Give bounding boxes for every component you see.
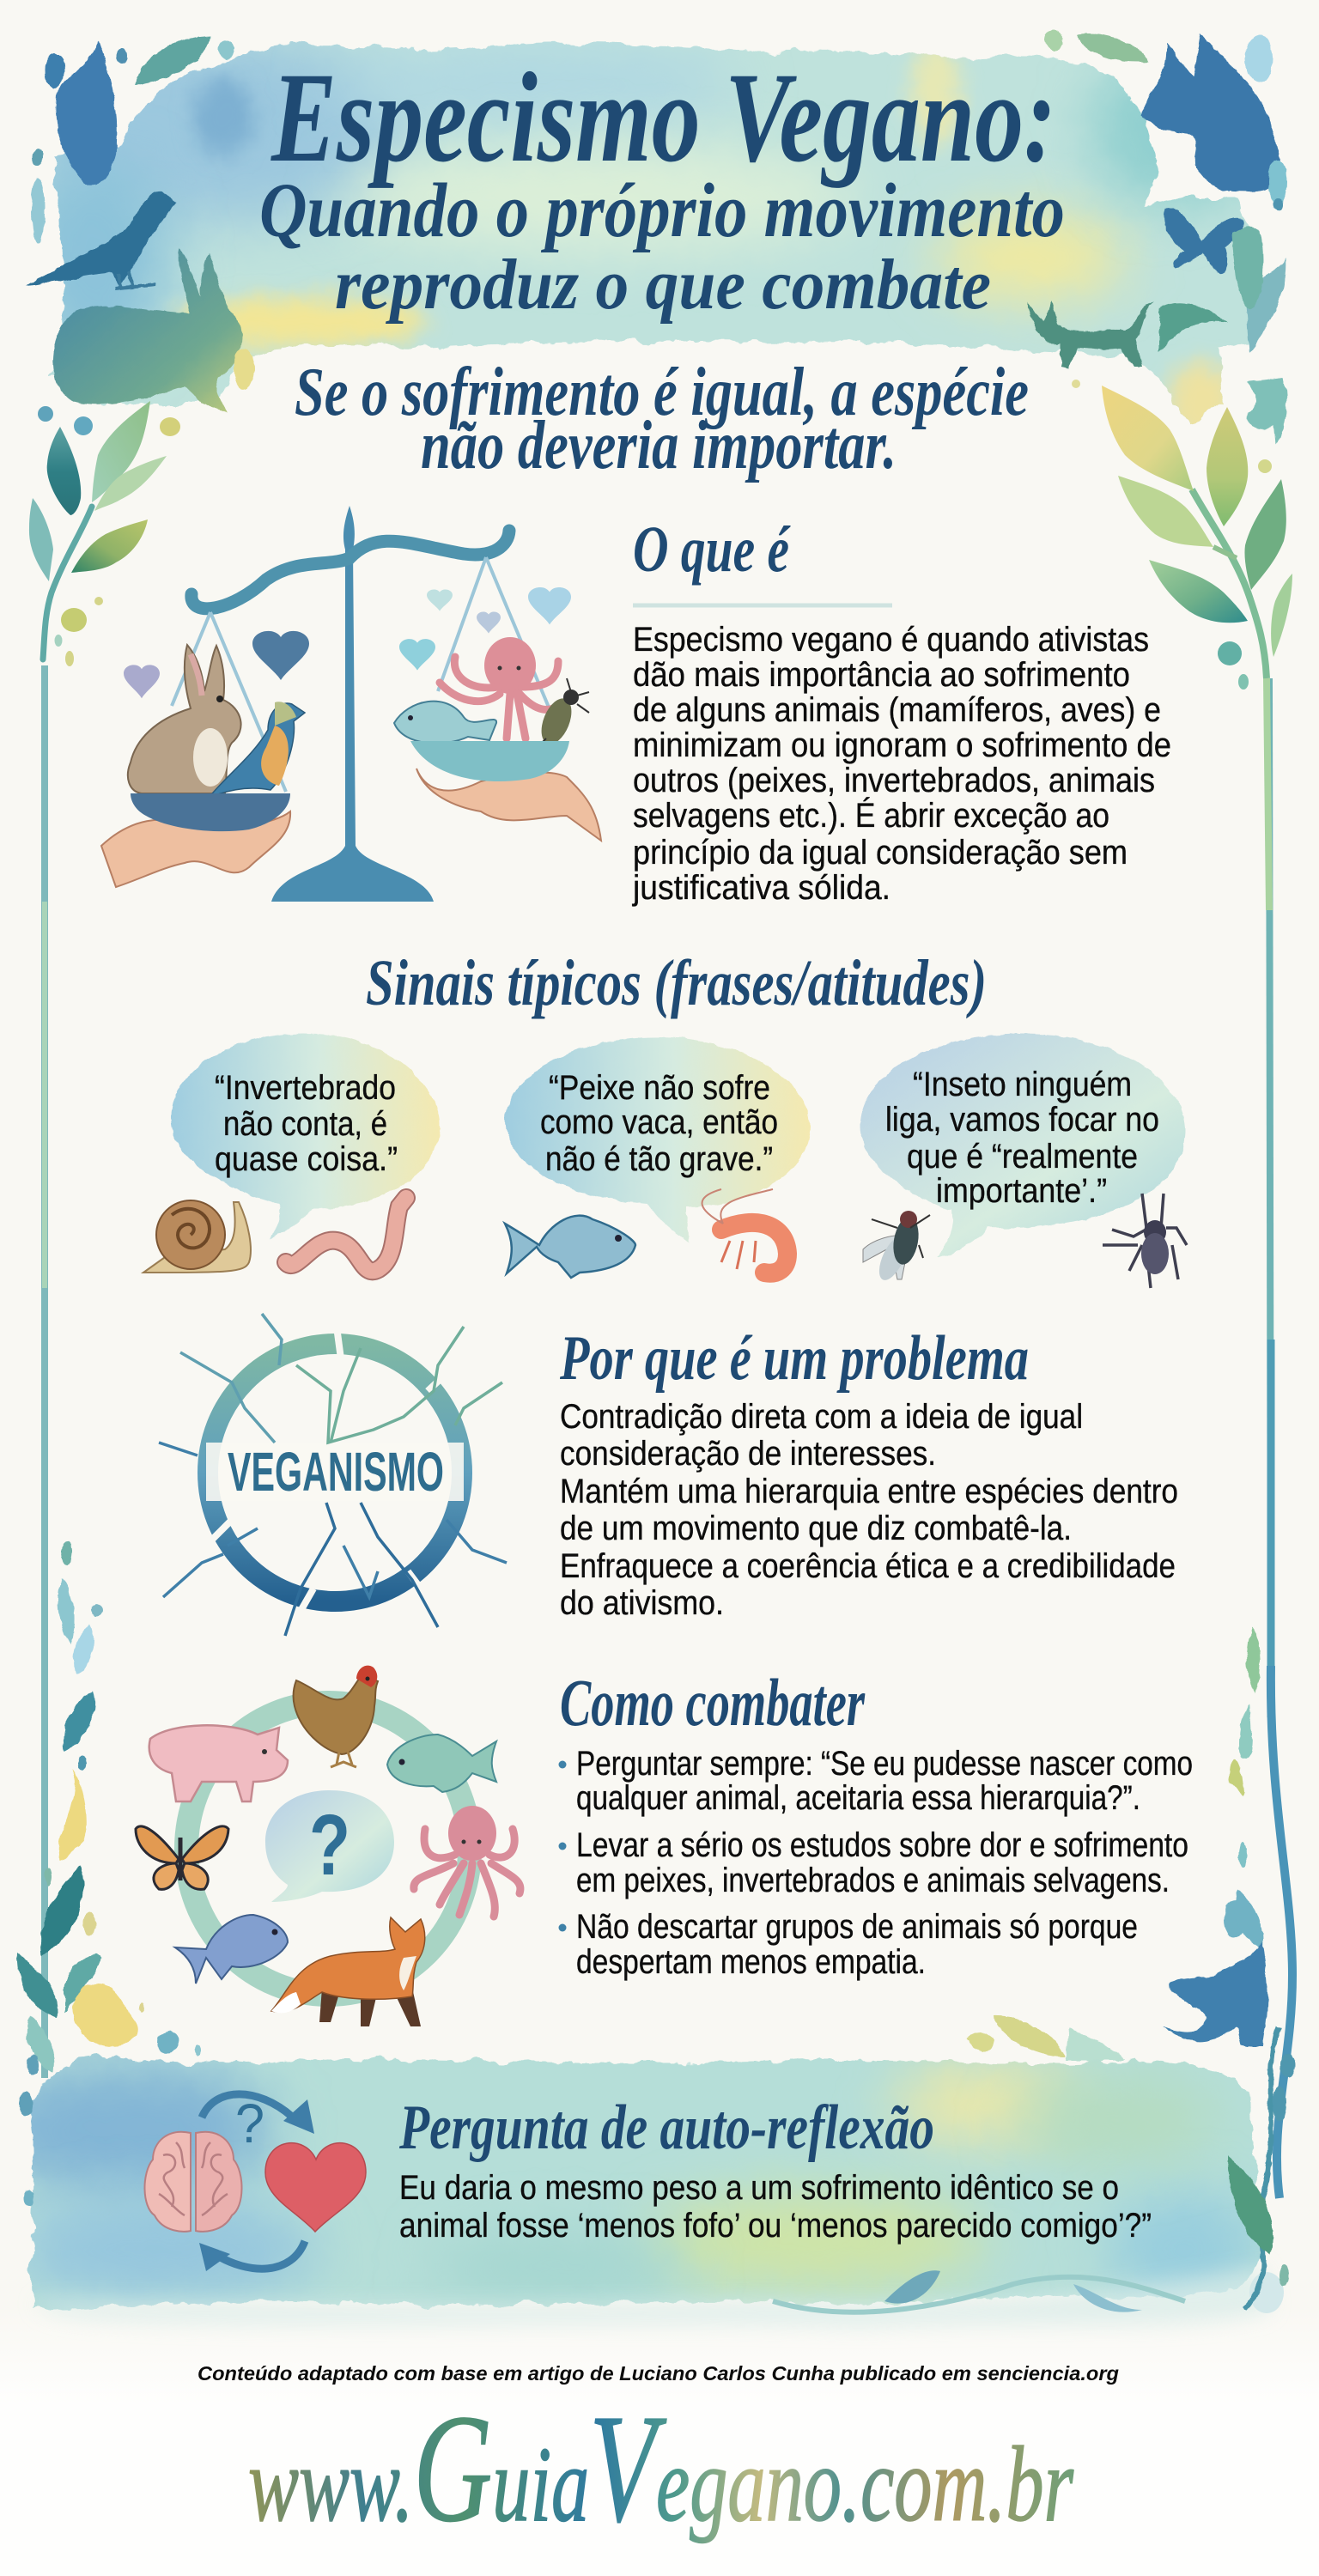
panel lower fade and vine: [34, 2267, 1284, 2327]
left bowl: [131, 793, 290, 831]
bottom right leaves: [966, 2015, 1125, 2061]
pink octopus: [414, 1806, 520, 1917]
octopus: [440, 637, 562, 738]
rabbit: [128, 645, 241, 793]
title: reproduz o que combate: [335, 245, 991, 325]
speech bubble 2: como vaca, então: [540, 1103, 778, 1141]
right upper vine: [1072, 380, 1292, 690]
body text: dão mais importância ao sofrimento: [633, 656, 1130, 694]
silhouette: bottom right cat: [1164, 1942, 1268, 2046]
body text: Enfraquece a coerência ética e a credibilidade: [560, 1547, 1176, 1585]
speech bubble 3: “Inseto ninguém: [913, 1066, 1132, 1103]
bird: [209, 702, 305, 798]
speech bubble 3: que é “realmente: [907, 1138, 1138, 1176]
left hand: [101, 811, 290, 887]
cycle arrows: [202, 2094, 305, 2269]
hearts: [124, 587, 571, 698]
heading: O que é: [633, 513, 791, 586]
silhouette: dog: [1140, 33, 1282, 191]
silhouette: bird: [26, 192, 177, 289]
section: como combater: [558, 1665, 1193, 1981]
brain: [144, 2132, 242, 2232]
body text: outros (peixes, invertebrados, animais: [633, 762, 1155, 799]
speech bubble 1: [171, 1033, 440, 1239]
icon: shrimp: [702, 1189, 787, 1273]
bottom right vine with leaves: [18, 2026, 1296, 2310]
body text: minimizam ou ignoram o sofrimento de: [633, 726, 1171, 764]
body text: [560, 1398, 1178, 1622]
pig: [149, 1725, 288, 1801]
title: Especismo Vegano:: [270, 46, 1056, 189]
question mark: ?: [235, 2093, 264, 2154]
beetle: [534, 678, 589, 756]
icon: fly: [863, 1211, 930, 1284]
speech bubble 3: liga, vamos focar no: [885, 1101, 1159, 1139]
right bowl: [410, 741, 569, 781]
icon: spider: [1103, 1194, 1187, 1288]
scale post and beam: [172, 506, 558, 902]
body text: Especismo vegano é quando ativistas: [633, 621, 1149, 659]
bullet 2: Levar a sério os estudos sobre dor e sofrimento: [576, 1826, 1188, 1864]
middle and lower border leaves: [17, 1540, 1263, 2074]
icon: worm: [286, 1198, 406, 1271]
ring gaps and band: [206, 1327, 455, 1619]
speech bubble 1: quase coisa.”: [215, 1140, 398, 1178]
body text: consideração de interesses.: [560, 1435, 936, 1473]
fox: [271, 1917, 425, 2026]
bullet 1: qualquer animal, aceitaria essa hierarquia?”.: [576, 1779, 1140, 1817]
heading underline: [633, 603, 892, 608]
bullet 3: despertam menos empatia.: [576, 1943, 926, 1981]
speech bubble 1: “Invertebrado: [215, 1069, 396, 1107]
decorative silhouette: blue shape top left: [56, 41, 117, 185]
butterfly: [136, 1826, 228, 1889]
heading: Pergunta de auto-reflexão: [398, 2093, 934, 2163]
illustration: balance scale with animals: [101, 506, 601, 902]
bullet 3: Não descartar grupos de animais só porque: [576, 1908, 1138, 1946]
fish in bowl: [394, 702, 496, 744]
body text: de um movimento que diz combatê-la.: [560, 1510, 1072, 1547]
silhouette: cat: [1026, 301, 1153, 369]
speech bubble 3: importante’.”: [936, 1172, 1107, 1210]
title: [259, 46, 1065, 325]
body text: selvagens etc.). É abrir exceção ao: [633, 796, 1109, 835]
cracks: [159, 1314, 507, 1636]
heading: Por que é um problema: [559, 1323, 1029, 1394]
right hand: [416, 769, 601, 841]
side border lines: [45, 665, 1292, 2198]
body text: do ativismo.: [560, 1584, 724, 1622]
tagline: não deveria importar.: [421, 408, 897, 483]
body text: [632, 621, 1171, 907]
header watercolor panel: [48, 41, 1249, 424]
section: por que é um problema: [559, 1323, 1178, 1622]
speech bubble 2: “Peixe não sofre: [549, 1069, 770, 1107]
top leaves and drops: [31, 29, 1287, 445]
blue fish: [175, 1915, 288, 1984]
source credit: Conteúdo adaptado com base em artigo de Luciano Carlos Cunha publicado em senciencia.org: [198, 2362, 1119, 2385]
icon: brain, heart and cycle arrows: [144, 2093, 366, 2271]
speech bubble 2: [505, 1037, 810, 1242]
body text: justificativa sólida.: [632, 869, 890, 907]
illustration: ring of animals: [136, 1666, 520, 2026]
bullet 2: em peixes, invertebrados e animais selvagens.: [576, 1862, 1170, 1899]
speech bubble 3: [860, 1034, 1185, 1258]
heading: Como combater: [560, 1665, 865, 1740]
bullet 1: Perguntar sempre: “Se eu pudesse nascer como: [576, 1745, 1193, 1783]
speech bubble 2: não é tão grave.”: [545, 1140, 773, 1178]
body text: Eu daria o mesmo peso a um sofrimento idêntico se o: [399, 2169, 1119, 2207]
tagline: [295, 355, 1029, 483]
icon: snail: [143, 1200, 251, 1273]
bullet 1: [558, 1745, 1193, 1817]
bullet 2: [558, 1826, 1188, 1899]
body text: animal fosse ‘menos fofo’ ou ‘menos parecido comigo’?”: [399, 2207, 1152, 2245]
section: pergunta de auto-reflexão: [398, 2093, 1152, 2245]
bullet 3: [558, 1908, 1138, 1981]
hen: [294, 1666, 378, 1767]
tagline: Se o sofrimento é igual, a espécie: [295, 355, 1029, 430]
bottom watercolor panel: [27, 2053, 1261, 2311]
teal fish: [387, 1735, 496, 1792]
speech bubble 1: não conta, é: [223, 1105, 387, 1143]
left upper vine: [29, 401, 180, 666]
body text: [399, 2169, 1152, 2245]
section heading: sinais típicos: Sinais típicos (frases/atitudes): [366, 947, 987, 1019]
silhouette: rabbit: [52, 246, 242, 412]
icon: fish: [505, 1216, 635, 1278]
body text: Mantém uma hierarquia entre espécies dentro: [560, 1473, 1178, 1510]
section: O que é: [632, 513, 1171, 907]
icon: cracked veganismo ring: [159, 1314, 507, 1636]
question bubble: [265, 1790, 394, 1902]
body text: Contradição direta com a ideia de igual: [560, 1398, 1083, 1436]
icon: cracked veganismo ring: VEGANISMO: [228, 1441, 444, 1503]
title: Quando o próprio movimento: [259, 168, 1065, 253]
body text: de alguns animais (mamíferos, aves) e: [633, 691, 1161, 729]
heart: [265, 2143, 366, 2232]
silhouette: butterfly: [1165, 207, 1243, 275]
website logo: www.GuiaVegano.com.br: [248, 2383, 1074, 2554]
question bubble: ?: [309, 1797, 350, 1893]
body text: princípio da igual consideração sem: [633, 834, 1128, 872]
